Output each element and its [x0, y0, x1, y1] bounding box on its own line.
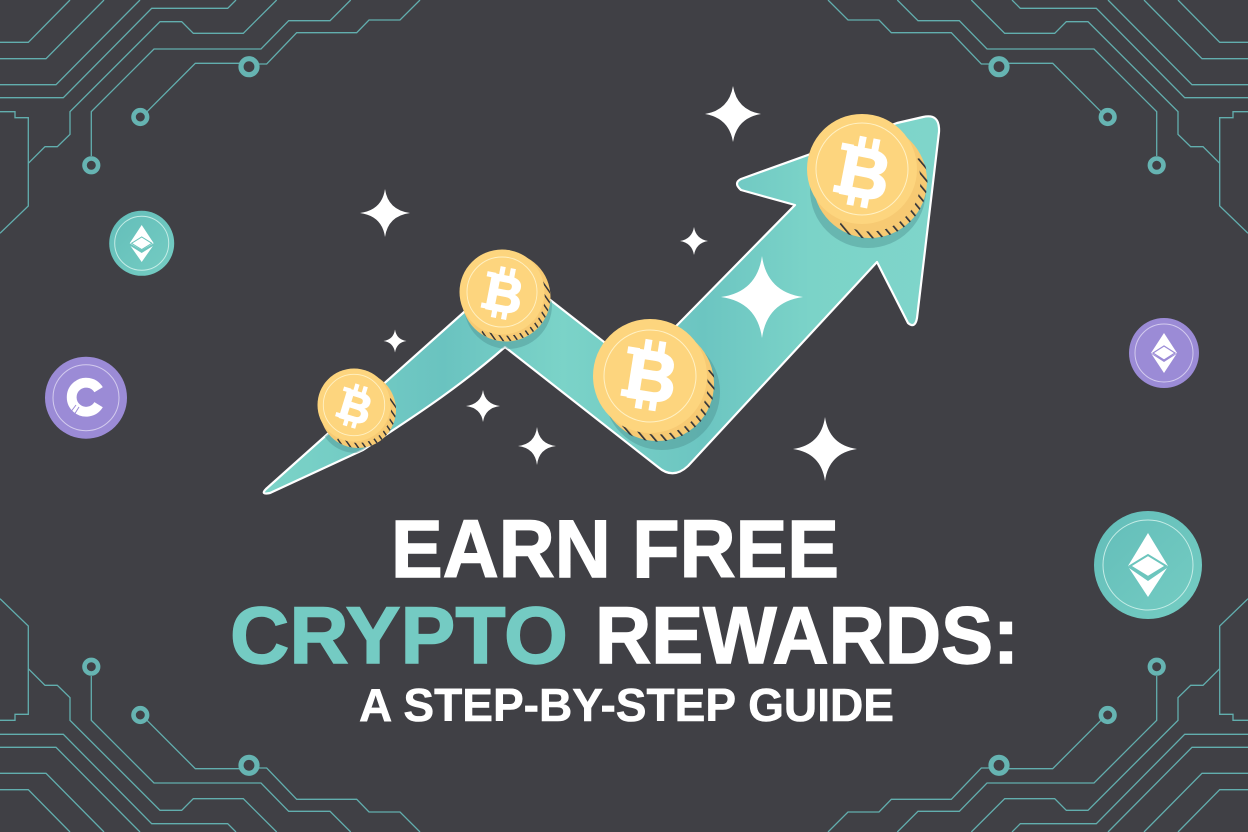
title line 2: highlighted word: CRYPTO: [230, 591, 568, 681]
coin: bitcoin 4: [807, 114, 927, 238]
coin: bitcoin 4: B: [833, 130, 897, 216]
sparkles: [360, 86, 857, 481]
coin: bitcoin 3: B: [621, 334, 683, 419]
subtitle: A STEP-BY-STEP GUIDE: [359, 679, 894, 731]
icon: purple ethereum token: [1129, 318, 1199, 388]
coin shadows on arrow: [324, 188, 926, 453]
coin: bitcoin 3: [593, 319, 714, 441]
circuit traces: bottom-right: [828, 599, 1248, 832]
coin: bitcoin 2: B: [480, 262, 528, 326]
arrow: rising zigzag chart line: [264, 116, 939, 493]
title line 2: rewards: REWARDS:: [595, 591, 1019, 681]
title: [230, 504, 1019, 731]
icon: small teal ethereum token: [109, 211, 174, 276]
coin: bitcoin 1: [318, 368, 396, 448]
icon: purple C token: [45, 357, 127, 439]
circuit traces: top-left: [0, 0, 420, 233]
coin: bitcoin 2: [460, 250, 550, 342]
circuit traces: bottom-left: [0, 599, 420, 832]
coin: bitcoin 1: B: [334, 380, 378, 435]
icon: large teal ethereum token: [1094, 511, 1202, 619]
circuit traces: top-right: [828, 0, 1248, 233]
title line 1: EARN FREE: [391, 504, 839, 595]
